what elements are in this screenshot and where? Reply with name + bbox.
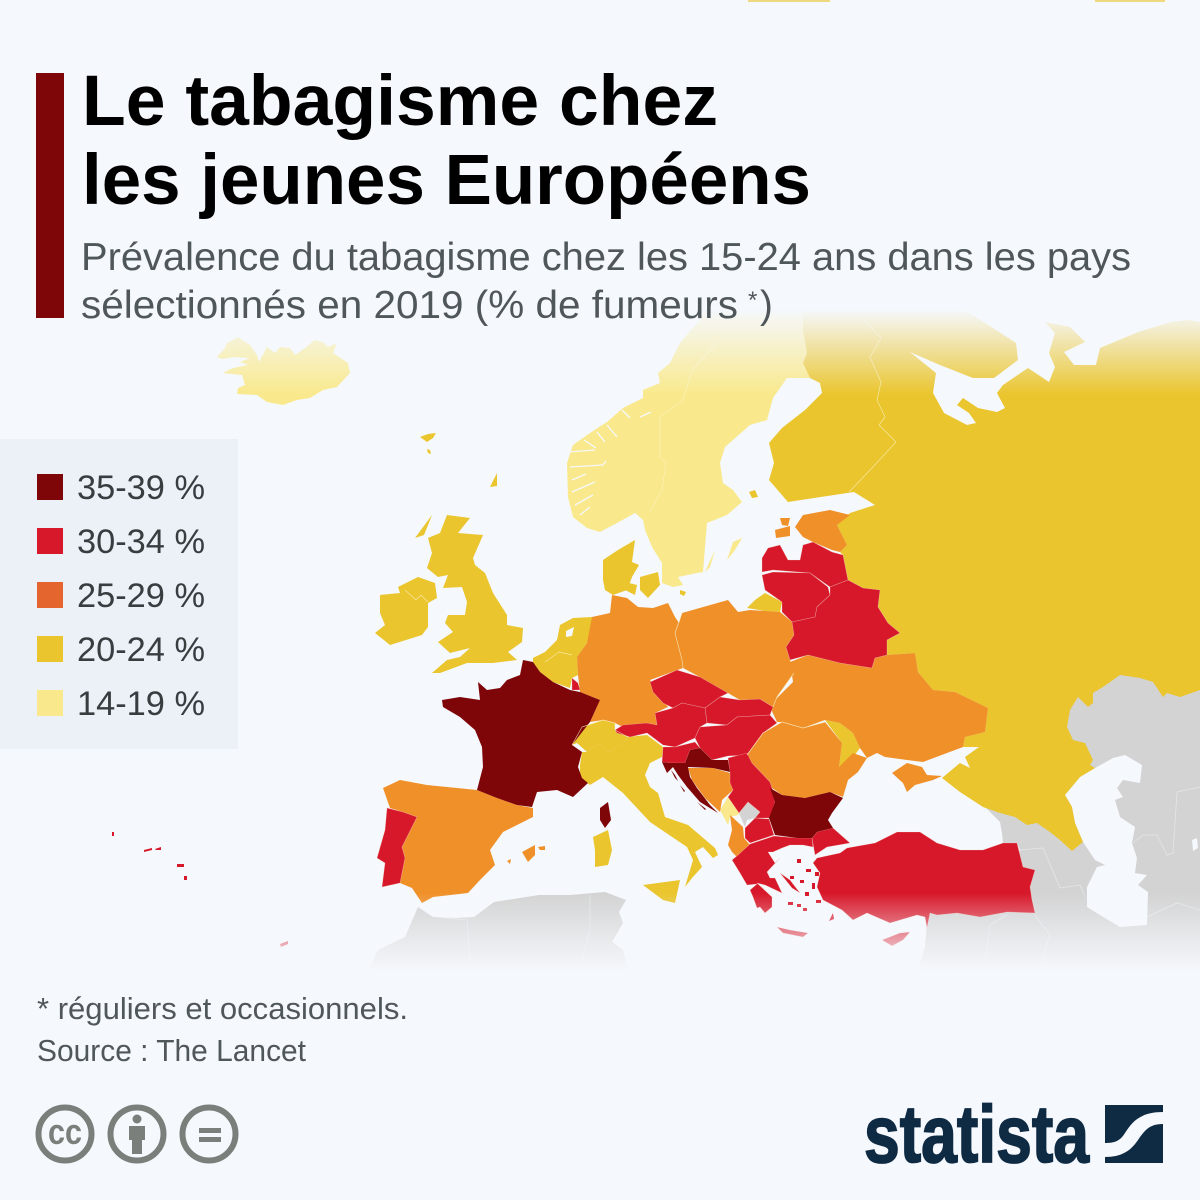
logo mark	[1105, 1105, 1163, 1163]
Albania	[728, 815, 750, 860]
Faroe Islands	[420, 433, 436, 454]
bottom fade over southern map	[0, 893, 1200, 971]
legend item 35-39: 35-39 %	[77, 469, 205, 507]
pale countries: Norway, Sweden, Iceland (14-19 %)	[217, 300, 810, 825]
Greece	[732, 836, 813, 913]
Great Britain	[427, 515, 523, 673]
Azores and Canary Islands	[112, 832, 288, 947]
title	[82, 62, 811, 220]
Ukraine	[770, 653, 988, 762]
icon: creative commons: cc	[48, 1111, 82, 1152]
legend panel	[0, 439, 238, 749]
grey land: non-surveyed countries	[368, 665, 1200, 970]
title: Le tabagisme chez	[82, 62, 718, 141]
Dutch inlet	[566, 627, 574, 637]
legend item 14-19: 14-19 %	[77, 685, 205, 723]
Estonia	[795, 510, 850, 552]
subtitle: sélectionnés en 2019 (% de fumeurs	[81, 284, 738, 327]
Romania	[747, 722, 867, 798]
Switzerland and Italy	[572, 720, 628, 752]
map of Europe	[0, 290, 1200, 971]
subtitle	[81, 236, 1131, 327]
Germany	[577, 595, 683, 727]
fjord details	[568, 410, 651, 515]
subtitle: Prévalence du tabagisme chez les 15-24 ans dans les pays	[81, 236, 1131, 279]
thin pale borders	[405, 320, 896, 755]
Ireland	[375, 577, 437, 645]
yellow countries: Russia, Finland (20-24 %)	[375, 300, 1200, 903]
top fade over northern map	[0, 290, 1200, 395]
Denmark	[603, 540, 639, 595]
Caspian Sea and Aral Sea	[1065, 755, 1198, 927]
icon: no derivatives	[182, 1108, 236, 1160]
subtitle: )	[760, 284, 773, 327]
orange countries (25-29 %)	[383, 510, 988, 903]
icon: attribution	[110, 1108, 164, 1160]
Aegean islands	[788, 859, 834, 921]
title accent bar	[36, 73, 64, 318]
Poland	[675, 600, 794, 707]
Bosnia	[688, 768, 733, 812]
legend item 20-24: 20-24 %	[77, 631, 205, 669]
Spain	[383, 780, 533, 903]
Statista logo: statista	[864, 1090, 1090, 1180]
footnote and source: Source : The Lancet	[37, 1033, 306, 1068]
dark red countries: France, Bulgaria, Croatia (35-39 %)	[442, 660, 843, 838]
red countries (30-34 %)	[112, 542, 1035, 947]
top edge marks	[748, 0, 1165, 2]
legend item 25-29: 25-29 %	[77, 577, 205, 615]
footnote and source: * réguliers et occasionnels.	[37, 991, 408, 1026]
icon: creative commons	[38, 1108, 92, 1160]
Benelux	[533, 617, 592, 688]
Cyprus and Crete	[882, 932, 910, 946]
title: les jeunes Européens	[82, 141, 811, 220]
grey land borders	[435, 787, 1200, 965]
footnote and source	[37, 991, 408, 1068]
Turkey	[812, 828, 850, 855]
legend item 30-34: 30-34 %	[77, 523, 205, 561]
subtitle: *	[748, 287, 757, 314]
